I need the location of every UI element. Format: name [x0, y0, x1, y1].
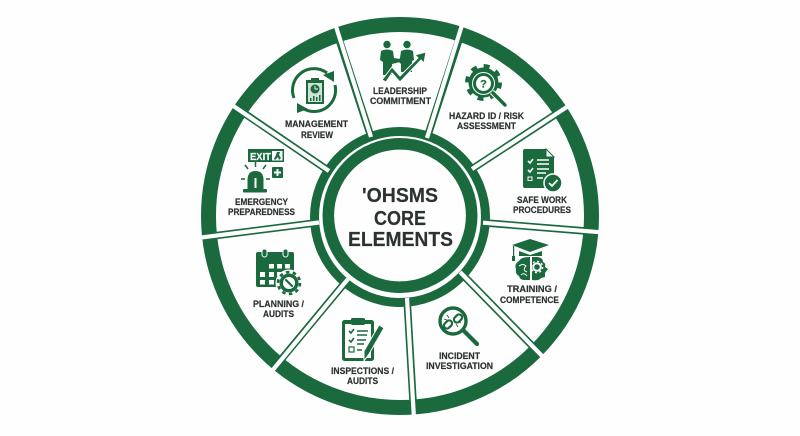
segment: planning / audits	[253, 249, 304, 319]
label: COMPETENCE	[500, 295, 559, 305]
label: LEADERSHIP	[373, 86, 427, 96]
icon: handshake and rising arrow	[380, 41, 426, 82]
icon: checklist document	[523, 149, 562, 192]
icon: clipboard and pencil	[342, 318, 384, 361]
label: SAFE WORK	[517, 195, 567, 205]
title: ELEMENTS	[348, 229, 453, 251]
outer ring	[208, 24, 592, 408]
label	[513, 195, 571, 215]
icon: exit sign and beacon: EXIT	[250, 151, 272, 163]
label: TRAINING /	[507, 284, 558, 294]
inner band backing	[314, 132, 486, 302]
label: ASSESSMENT	[457, 121, 516, 131]
label: PLANNING /	[253, 299, 304, 309]
label: REVIEW	[301, 130, 333, 140]
centre hub ring	[328, 144, 472, 287]
label	[426, 351, 493, 371]
label	[500, 284, 559, 305]
segment: management review	[285, 69, 348, 140]
segment divider borders	[216, 40, 584, 400]
segment divider gaps	[194, 12, 606, 424]
segment: incident investigation	[426, 308, 493, 371]
segment: emergency preparedness	[228, 149, 295, 217]
title	[348, 185, 453, 251]
label	[449, 111, 524, 131]
label: INCIDENT	[439, 351, 480, 361]
label: AUDITS	[263, 309, 294, 319]
label	[370, 86, 431, 106]
label: INVESTIGATION	[426, 361, 493, 371]
label	[331, 366, 394, 386]
label	[253, 299, 304, 319]
icon: magnifier over broken chain	[440, 308, 477, 344]
icon: graduation cap with brain and gear	[512, 239, 549, 280]
title: 'OHSMS	[362, 185, 438, 207]
segment: safe work procedures	[513, 149, 571, 215]
label: PROCEDURES	[513, 205, 571, 215]
label: MANAGEMENT	[285, 119, 348, 129]
label: PREPAREDNESS	[228, 207, 295, 217]
label: EMERGENCY	[235, 197, 288, 207]
label: COMMITMENT	[370, 96, 431, 106]
segment: leadership commitment	[370, 41, 431, 106]
label	[285, 119, 348, 140]
label: AUDITS	[347, 376, 378, 386]
segment: hazard id / risk assessment	[449, 66, 524, 131]
title: CORE	[374, 208, 426, 230]
label: INSPECTIONS /	[331, 366, 394, 376]
icon: calendar and gear	[256, 249, 302, 296]
segment: inspections / audits	[331, 318, 394, 386]
icon: gear and magnifier: ?	[480, 78, 487, 90]
label	[228, 197, 295, 217]
icon: review cycle with clipboard	[293, 69, 336, 113]
segment: training / competence	[500, 239, 559, 305]
label: HAZARD ID / RISK	[449, 111, 524, 121]
